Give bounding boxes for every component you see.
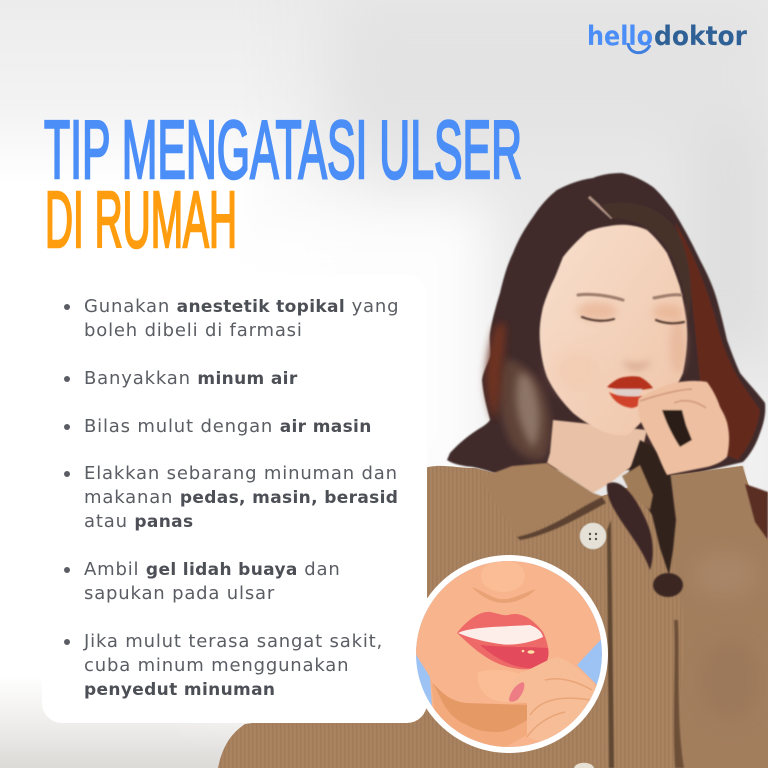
hair parting — [589, 197, 612, 218]
illustrated neck and face — [416, 561, 601, 747]
chin highlight — [478, 670, 522, 702]
dark hair right of neck — [628, 440, 676, 575]
panel: tips list — [42, 275, 427, 723]
neck — [547, 420, 647, 493]
logo stethoscope — [628, 43, 650, 53]
tip 4 — [64, 463, 398, 532]
teeth — [458, 625, 543, 645]
neck shadow — [433, 683, 527, 732]
lips — [457, 612, 548, 669]
placket shadow — [607, 520, 614, 768]
tip 1 — [64, 296, 399, 341]
nose — [622, 358, 652, 369]
face — [540, 202, 691, 435]
tip 6: penyedut minuman — [84, 680, 275, 700]
logo: hellodoktor: doktor — [654, 21, 748, 52]
hair red tones right — [675, 222, 760, 460]
tip 4: makanan pedas, masin, berasid — [84, 487, 398, 508]
lips — [607, 376, 653, 408]
tip 1: Gunakan anestetik topikal yang — [84, 296, 399, 317]
button — [580, 523, 606, 549]
hand — [638, 381, 729, 475]
hair red tones left — [486, 322, 505, 420]
tip 5: Ambil gel lidah buaya dan — [84, 559, 341, 580]
tip 5: sapukan pada ulsar — [84, 583, 275, 604]
sweater — [218, 466, 768, 768]
sweater sleeve — [666, 466, 768, 768]
sleeve fuzz — [693, 553, 760, 720]
tip 5 — [64, 559, 341, 604]
tip 3: Bilas mulut dengan air masin — [84, 416, 372, 437]
tip 1: boleh dibeli di farmasi — [84, 320, 303, 341]
fingernail — [509, 682, 524, 702]
upper lip dent — [472, 587, 536, 603]
tip 2: Banyakkan minum air — [84, 368, 298, 389]
finger hand — [514, 658, 596, 742]
eyebrows — [578, 294, 681, 300]
lower button — [574, 763, 594, 768]
tip 4: Elakkan sebarang minuman dan — [84, 463, 398, 484]
collar right — [622, 465, 653, 510]
tip 6: Jika mulut terasa sangat sakit, — [84, 631, 383, 652]
collar left — [480, 463, 604, 537]
tip 4: atau panas — [84, 511, 193, 532]
logo wordmark: hello — [587, 21, 653, 52]
hair behind right shoulder — [745, 484, 768, 540]
hair highlight lower left — [499, 360, 551, 459]
ulcer spots — [528, 650, 534, 654]
philtrum highlight — [481, 560, 525, 592]
neck lower tone — [431, 680, 527, 750]
braid — [607, 482, 683, 597]
fringe over forehead — [600, 202, 691, 325]
hair — [447, 173, 765, 480]
tip 6: cuba minum menggunakan — [84, 655, 349, 676]
closed eyes — [582, 317, 684, 323]
title: DI RUMAH — [45, 175, 237, 264]
inset illustration: mouth ulcer — [416, 555, 608, 753]
tip 6 — [64, 631, 383, 700]
